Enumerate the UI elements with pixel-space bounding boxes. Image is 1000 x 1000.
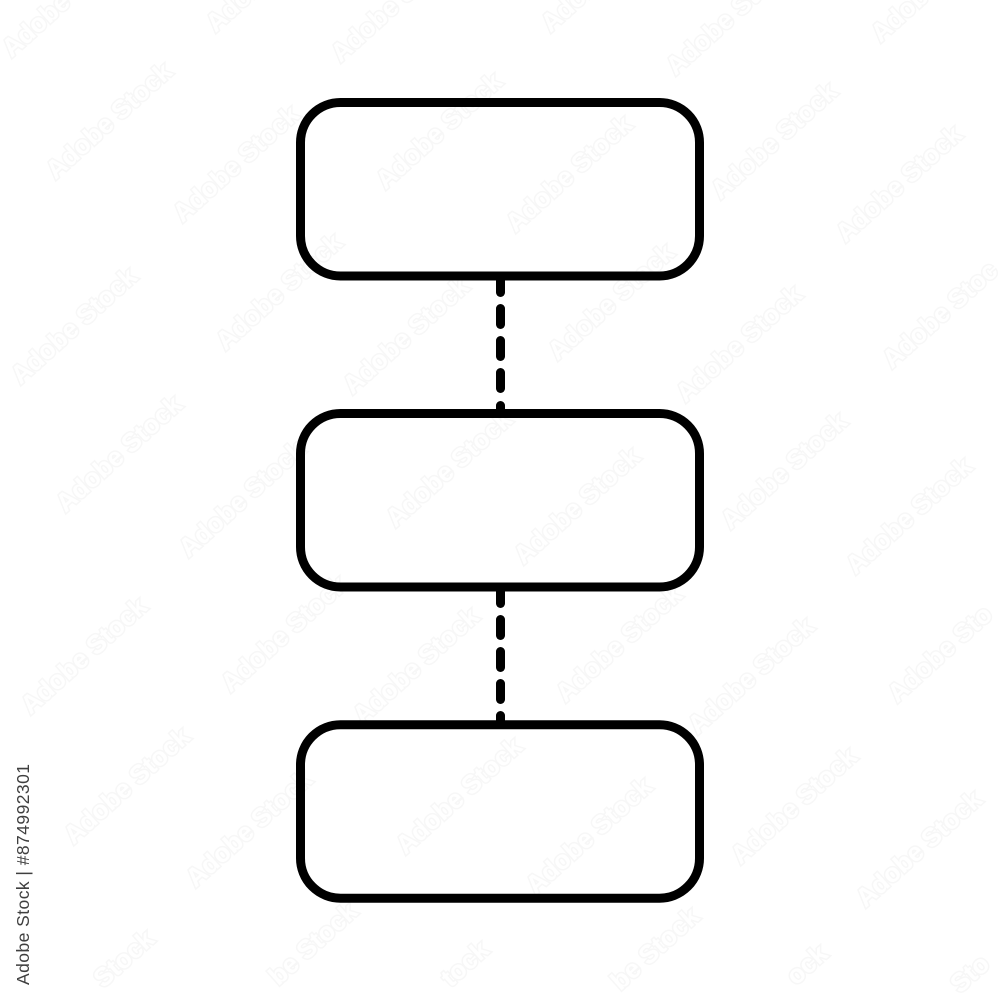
watermark pattern: Adobe Stock (214, 569, 353, 698)
watermark pattern: tock (435, 934, 495, 992)
watermark pattern: Adobe Stock (849, 784, 988, 913)
watermark pattern: Adobe Stock (49, 389, 188, 518)
watermark pattern: Adobe Stoc (876, 255, 1000, 374)
stock id side text: Adobe Stock | #874992301 (13, 764, 33, 985)
watermark pattern: Adobe Stock (379, 404, 518, 533)
watermark pattern: Adobe Stock (369, 66, 508, 195)
watermark pattern: Adobe Stock (681, 611, 820, 740)
watermark pattern: Adobe Stock (4, 261, 143, 390)
watermark pattern: Adobe Stock (166, 99, 305, 228)
watermark pattern: Adobe Stock (389, 731, 528, 860)
watermark pattern: Adobe Stock (346, 601, 485, 730)
watermark pattern: Adobe Stock (507, 441, 646, 570)
box: top (300, 102, 700, 276)
watermark pattern: Adobe Stock (519, 771, 658, 900)
watermark pattern: Adobe Stock (39, 56, 178, 185)
watermark pattern: Adobe Stock (669, 279, 808, 408)
watermark pattern: Adobe Stock (541, 237, 680, 366)
connector: top to middle box (496, 278, 505, 413)
watermark pattern: be Stock (604, 901, 705, 996)
watermark pattern: Adobe Stock (704, 76, 843, 205)
watermark pattern: Adobe Stock (336, 271, 475, 400)
watermark pattern: be Stock (262, 896, 363, 991)
watermark pattern: ock (780, 938, 834, 991)
box: middle (300, 414, 700, 587)
box: bottom (300, 725, 700, 898)
watermark pattern: Stock (87, 923, 160, 993)
watermark pattern: Adobe Stock (14, 591, 153, 720)
watermark pattern: Adobe Stock (829, 119, 968, 248)
watermark pattern: Adobe Stock (172, 434, 311, 563)
watermark pattern: Adobe Stock (839, 451, 978, 580)
watermark pattern: Sto (944, 948, 995, 999)
watermark pattern: Adobe Stock (549, 579, 688, 708)
watermark pattern: Adobe Stock (209, 227, 348, 356)
watermark pattern: Adobe Stock (179, 764, 318, 893)
watermark pattern: Adobe Stock (714, 406, 853, 535)
watermark pattern: Adobe Stock (724, 741, 863, 870)
watermark pattern: Adobe Sto (881, 599, 998, 708)
watermark pattern: Adobe Stock (499, 109, 638, 238)
connector: middle to bottom box (496, 589, 505, 724)
watermark pattern: Adobe Stock (57, 721, 196, 850)
